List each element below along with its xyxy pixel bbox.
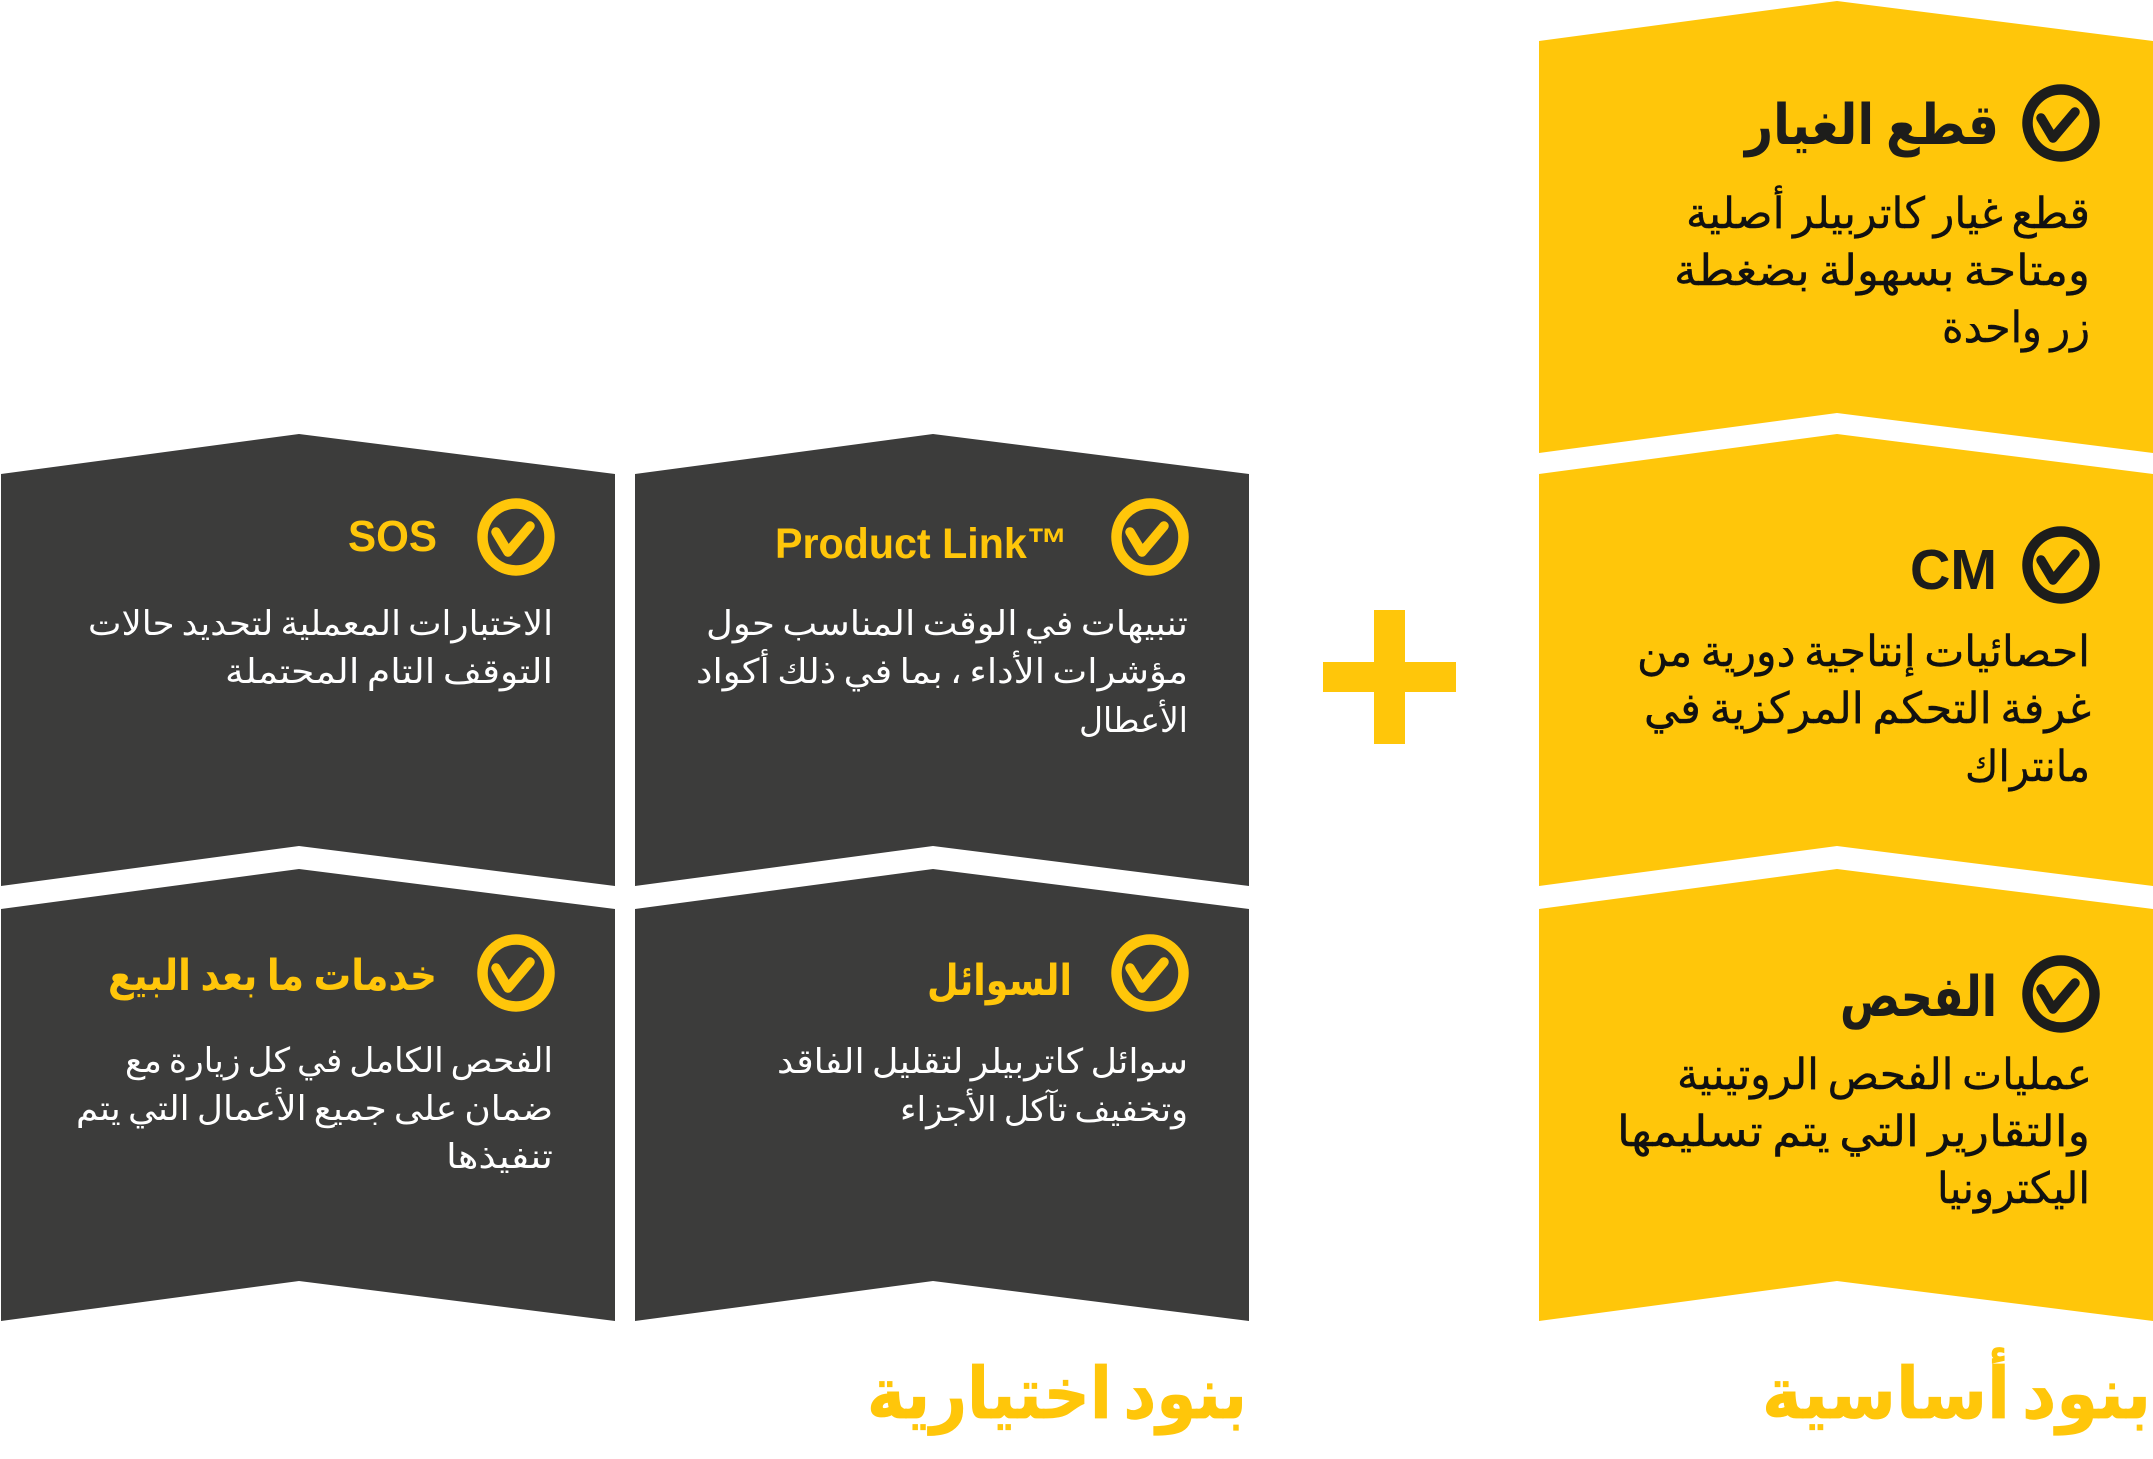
text block: inspection description: والتقارير التي يتم تسليمها	[1617, 1107, 2090, 1157]
text block: Product Link description: تنبيهات في الوقت المناسب حول	[706, 604, 1188, 644]
heading: Product Link: Product Link™	[775, 520, 1068, 568]
panel: after-sales services	[1, 869, 615, 1321]
text block: Product Link description: الأعطال	[1079, 699, 1188, 741]
title: optional items: بنود اختيارية	[867, 1352, 1247, 1435]
text block: CM description: مانتراك	[1965, 742, 2090, 792]
heading: SOS: SOS	[348, 512, 437, 561]
heading: after-sales services: خدمات ما بعد البيع	[108, 951, 437, 1001]
text block: Product Link description	[696, 604, 1188, 741]
icon: check circle	[2028, 960, 2094, 1028]
heading: fluids: السوائل	[927, 956, 1072, 1006]
panel: SOS	[1, 434, 615, 886]
text block: after-sales description: الفحص الكامل في كل زيارة مع	[125, 1041, 553, 1081]
heading: spare parts: قطع الغيار	[1742, 93, 1999, 158]
text block: spare parts description: زر واحدة	[1942, 303, 2090, 353]
icon: check circle	[482, 504, 550, 570]
text block: inspection description: اليكترونيا	[1937, 1164, 2090, 1214]
text block: after-sales description	[76, 1041, 553, 1177]
panel: Product Link	[635, 434, 1249, 886]
panel: inspection	[1539, 869, 2153, 1321]
text block: inspection description	[1617, 1050, 2092, 1214]
panel: spare parts	[1539, 1, 2153, 453]
text block: spare parts description: ومتاحة بسهولة بضغطة	[1674, 246, 2090, 296]
panel: CM	[1539, 434, 2153, 886]
icon: check circle	[1116, 504, 1184, 570]
text block: spare parts description	[1674, 185, 2090, 353]
text block: CM description: احصائيات إنتاجية دورية من	[1637, 627, 2090, 677]
icon: check circle	[2028, 532, 2094, 598]
icon: check circle	[1116, 940, 1184, 1006]
icon: check circle	[482, 940, 550, 1006]
text block: fluids description: سوائل كاتربيلر لتقليل الفاقد	[777, 1042, 1188, 1082]
heading: CM: CM	[1910, 538, 1997, 602]
icon: check circle	[2028, 90, 2094, 156]
icon: plus sign	[1323, 610, 1456, 744]
text block: after-sales description: ضمان على جميع الأعمال التي يتم	[76, 1087, 553, 1129]
heading: inspection: الفحص	[1840, 965, 1997, 1030]
text block: after-sales description: تنفيذها	[446, 1137, 553, 1177]
text block: fluids description	[777, 1042, 1188, 1130]
text block: CM description	[1637, 627, 2091, 792]
text block: SOS description: الاختبارات المعملية لتحديد حالات	[88, 604, 553, 644]
text block: fluids description: وتخفيف تآكل الأجزاء	[900, 1088, 1188, 1130]
text block: SOS description	[88, 604, 553, 692]
text block: Product Link description: مؤشرات الأداء ، بما في ذلك أكواد	[696, 649, 1188, 692]
panel: fluids	[635, 869, 1249, 1321]
text block: inspection description: عمليات الفحص الروتينية	[1677, 1050, 2092, 1100]
text block: spare parts description: قطع غيار كاتربيلر أصلية	[1686, 185, 2090, 239]
text block: CM description: غرفة التحكم المركزية في	[1644, 684, 2091, 734]
text block: SOS description: التوقف التام المحتملة	[225, 652, 553, 692]
